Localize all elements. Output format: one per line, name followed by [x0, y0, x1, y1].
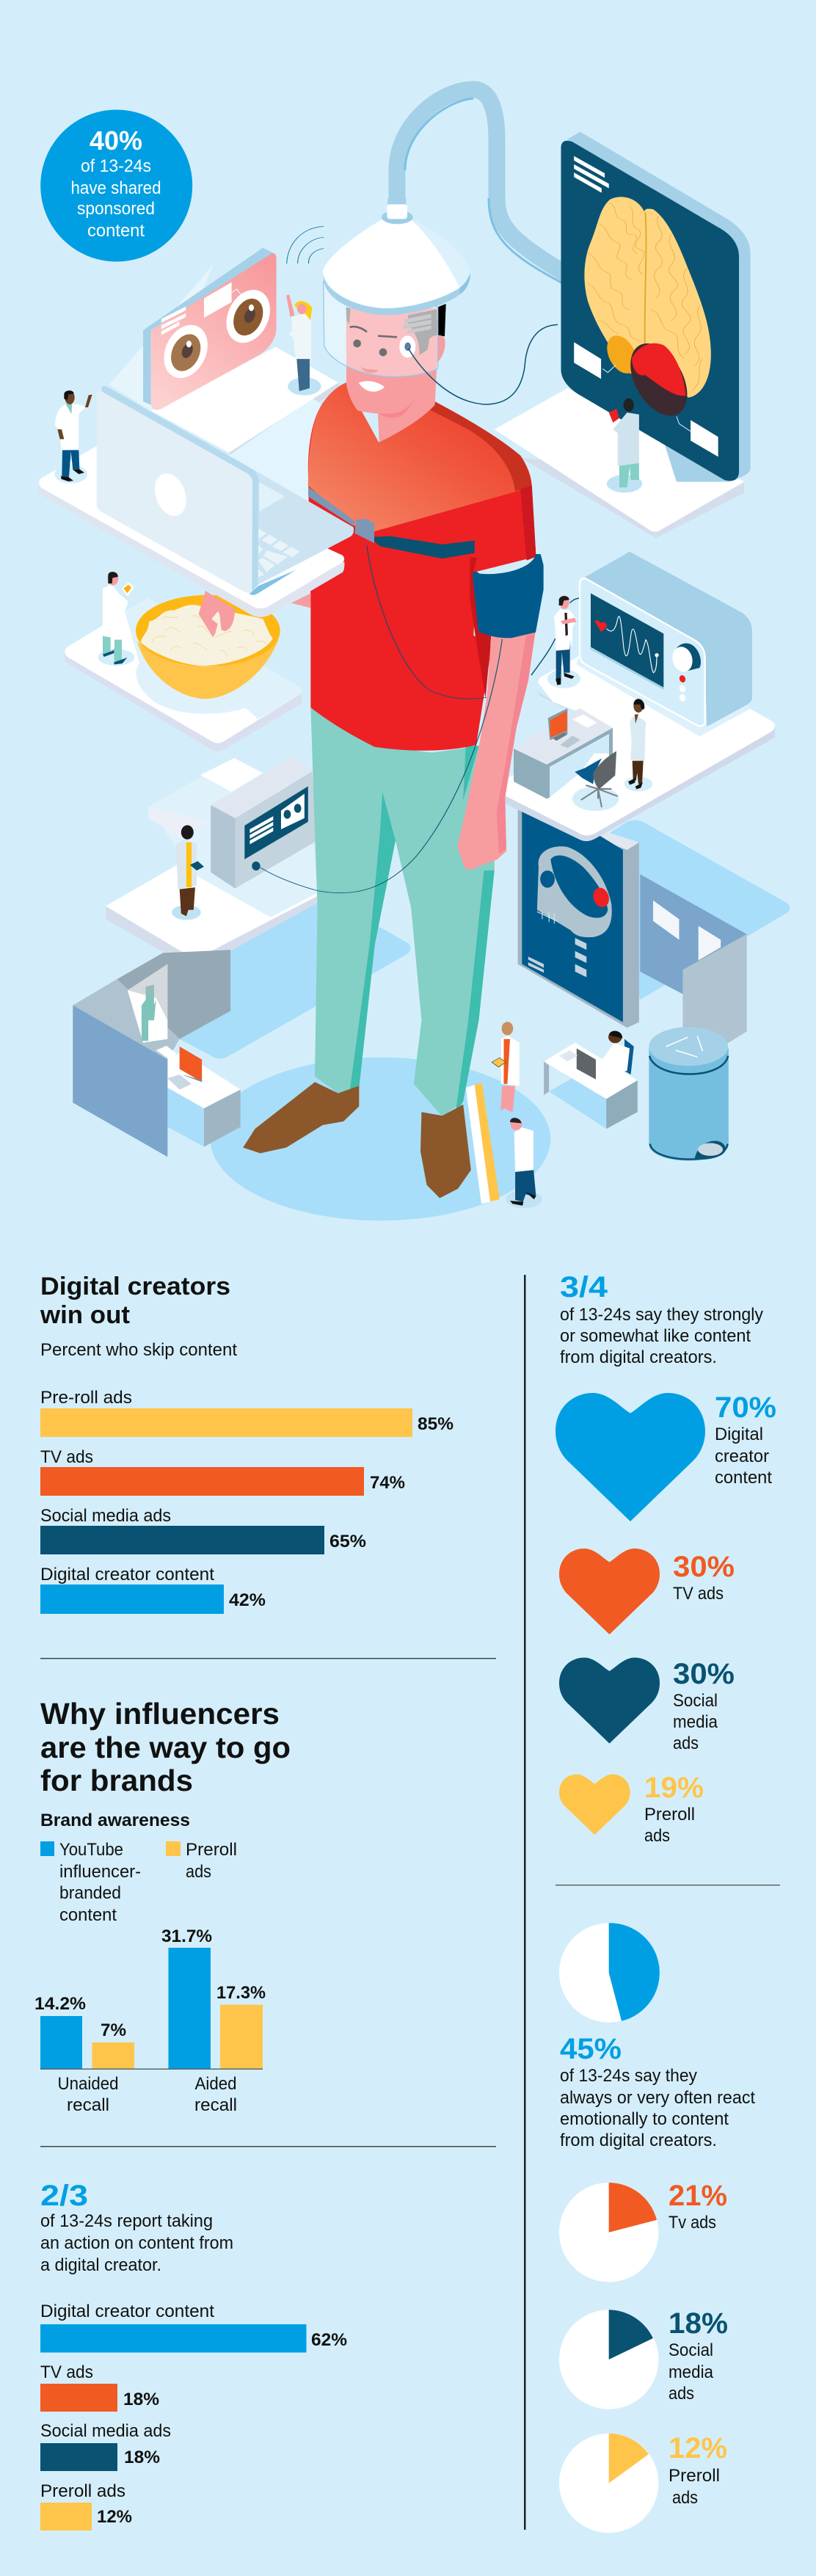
stat text: from digital creators. — [560, 1347, 717, 1367]
pie: 45% — [559, 1923, 660, 2023]
heart: social media ads — [559, 1658, 735, 1753]
bar: tv ads: TV ads — [40, 1447, 93, 1467]
brain — [584, 197, 711, 421]
bowl of popcorn — [136, 595, 280, 699]
callout: 40% circle: of 13-24s — [81, 156, 151, 176]
bar: tv ads — [40, 2362, 159, 2412]
right eye — [220, 287, 277, 346]
panel: emotional reaction pies — [559, 1923, 755, 2533]
legend: branded — [59, 1883, 121, 1903]
legend: content — [59, 1905, 117, 1925]
stat heading: 45% — [560, 2033, 622, 2065]
scientist at far left — [54, 390, 92, 484]
wires — [261, 545, 502, 893]
stat text: or somewhat like content — [560, 1326, 751, 1346]
heading: win out — [40, 1301, 130, 1329]
heart: social media ads: ads — [673, 1733, 699, 1753]
heart: preroll ads — [559, 1772, 704, 1846]
floor shapes — [180, 820, 790, 1220]
pie: social media ads: 18% — [669, 2307, 728, 2340]
bar: pre-roll ads: Pre-roll ads — [40, 1388, 132, 1408]
scientist with tablet, yellow dress — [172, 825, 204, 920]
bar: social media ads: 65% — [329, 1532, 366, 1551]
heading — [40, 1273, 230, 1329]
bar: digital creator content — [40, 1565, 266, 1614]
pie: tv ads: 21% — [669, 2180, 727, 2212]
callout boxes — [574, 342, 718, 456]
subheading: Brand awareness — [40, 1811, 190, 1830]
column chart: brand recall: recall — [194, 2095, 237, 2115]
helmet — [323, 198, 470, 315]
pie: preroll ads: ads — [672, 2488, 698, 2508]
bar: tv ads — [40, 1447, 405, 1496]
callout: 40% circle — [40, 110, 192, 261]
platform: under brain — [495, 388, 744, 538]
laptop connector — [308, 487, 354, 526]
man: sleeve shading — [470, 558, 491, 699]
pie: social media ads — [559, 2307, 728, 2409]
column chart: brand recall: Aided — [195, 2074, 236, 2094]
bar: digital creator content: 62% — [311, 2330, 347, 2350]
heart monitor — [580, 552, 752, 727]
bar: digital creator content: 42% — [229, 1590, 266, 1610]
platform: upper left — [109, 265, 359, 520]
panel: three quarters hearts — [555, 1271, 776, 1846]
laptop — [97, 386, 374, 595]
bar: social media ads — [40, 1506, 366, 1554]
signal arcs — [287, 227, 324, 263]
bar: social media ads: Social media ads — [40, 2421, 171, 2441]
eye panel labels — [161, 283, 232, 335]
bar: digital creator content: Digital creator content — [40, 1565, 214, 1584]
platform: laptop — [39, 444, 344, 617]
stat text: of 13-24s say they — [560, 2066, 697, 2086]
scientist waving by eye panel — [286, 294, 321, 396]
bar: tv ads: TV ads — [40, 2362, 93, 2382]
stat text: a digital creator. — [40, 2255, 161, 2275]
scientist at heart monitor — [531, 595, 580, 688]
heart: preroll ads: ads — [644, 1826, 670, 1846]
legend: ads — [186, 1862, 211, 1882]
heart: digital creator content: Digital — [715, 1425, 763, 1444]
column chart: brand recall: 17.3% — [216, 1983, 266, 2003]
man: trousers — [310, 707, 495, 1116]
eye panel — [143, 248, 277, 410]
bar: preroll ads: 12% — [97, 2507, 132, 2527]
column chart: brand recall: 14.2% — [34, 1994, 86, 2014]
illustration: man wired up in a lab — [39, 90, 790, 1220]
pie: tv ads — [559, 2180, 727, 2282]
man: shirt — [308, 382, 536, 751]
facial features — [353, 340, 361, 347]
stat text: of 13-24s report taking — [40, 2211, 213, 2231]
bar: social media ads: Social media ads — [40, 1506, 171, 1526]
pie: tv ads: Tv ads — [669, 2213, 716, 2233]
platform: bowl — [65, 598, 302, 752]
tube from helmet — [397, 90, 567, 283]
pie: preroll ads: 12% — [669, 2432, 727, 2464]
legend: Preroll — [186, 1840, 237, 1860]
scientist at lower desk — [544, 1031, 638, 1129]
heart: preroll ads: 19% — [644, 1772, 704, 1804]
recycling bin — [649, 1027, 729, 1161]
heart: tv ads: 30% — [673, 1551, 735, 1583]
stat text: always or very often react — [560, 2088, 755, 2108]
legend — [40, 1840, 237, 1925]
bar: tv ads: 18% — [123, 2390, 159, 2409]
scientist with tablet at brain panel — [607, 399, 642, 492]
bar: preroll ads: Preroll ads — [40, 2481, 125, 2501]
heart: tv ads — [559, 1549, 735, 1634]
pie: social media ads: Social — [669, 2340, 713, 2360]
bar: pre-roll ads: 85% — [418, 1414, 453, 1434]
ruler — [466, 1083, 500, 1204]
man: chest strap — [370, 536, 475, 559]
column chart: brand recall: recall — [67, 2095, 109, 2115]
legend: influencer- — [59, 1862, 141, 1882]
panel text lines — [574, 156, 609, 193]
keyboard keys — [258, 528, 299, 577]
scientist woman on right platform — [624, 699, 652, 791]
man: neck and face — [324, 281, 558, 443]
column chart: brand recall: Unaided — [57, 2074, 119, 2094]
bar: digital creator content — [40, 2302, 347, 2353]
stat heading: 2/3 — [40, 2180, 88, 2212]
stat heading: 3/4 — [560, 1271, 608, 1303]
pie: preroll ads: Preroll — [669, 2466, 720, 2486]
platform: mid left with machine — [106, 757, 318, 968]
panel: digital creators win out — [40, 1273, 453, 1614]
heart: digital creator content — [555, 1391, 776, 1521]
pie: preroll ads — [559, 2432, 727, 2533]
hair — [346, 307, 438, 355]
skull panel — [518, 809, 639, 1027]
heart: digital creator content: creator — [715, 1447, 769, 1466]
bar: pre-roll ads — [40, 1388, 453, 1437]
heart: preroll ads: Preroll — [644, 1805, 695, 1824]
scientist woman with yellow tablet — [492, 1022, 520, 1112]
man: shoes — [243, 1082, 471, 1198]
column chart: brand recall: 7% — [101, 2020, 126, 2040]
bar: tv ads: 74% — [370, 1473, 405, 1493]
stat text: from digital creators. — [560, 2131, 717, 2150]
scientist with ruler — [506, 1118, 542, 1208]
monitor machine — [211, 757, 318, 889]
man: forearm — [457, 633, 535, 870]
callout: 40% circle: sponsored — [77, 199, 155, 219]
pie: social media ads: media — [669, 2362, 714, 2382]
heading: for brands — [40, 1764, 193, 1797]
callout: 40% circle: content — [87, 221, 145, 241]
bar: social media ads: 18% — [124, 2448, 160, 2467]
brain panel — [561, 131, 751, 482]
electrode and wire to brain panel — [399, 335, 415, 357]
left eye — [158, 322, 214, 381]
visor — [324, 281, 438, 376]
platform: right with monitor and desk — [495, 655, 775, 841]
stat text — [560, 1305, 763, 1367]
heart: social media ads: media — [673, 1712, 718, 1732]
column chart: brand recall — [34, 1926, 266, 2115]
heading: are the way to go — [40, 1731, 291, 1764]
callout: 40% circle: have shared — [70, 178, 161, 198]
column chart: brand recall: 31.7% — [161, 1926, 212, 1946]
left cabin with desk — [73, 950, 241, 1157]
panel: why influencers — [34, 1697, 291, 2115]
stat text — [560, 2066, 755, 2150]
bar: preroll ads — [40, 2481, 132, 2530]
stat text: an action on content from — [40, 2233, 233, 2253]
subtitle: Percent who skip content — [40, 1340, 237, 1360]
heart: digital creator content: content — [715, 1468, 772, 1488]
bar: social media ads — [40, 2421, 171, 2471]
stat text: of 13-24s say they strongly — [560, 1305, 763, 1325]
man: blood pressure cuff — [473, 554, 544, 638]
heart: tv ads: TV ads — [673, 1584, 724, 1604]
heart: digital creator content: 70% — [715, 1391, 776, 1424]
stat text — [40, 2211, 233, 2275]
heading: Why influencers — [40, 1697, 280, 1731]
panel: two thirds take action — [40, 2180, 347, 2530]
heading — [40, 1697, 291, 1797]
heart: social media ads: Social — [673, 1691, 718, 1711]
heading: Digital creators — [40, 1273, 230, 1300]
pie: social media ads: ads — [669, 2384, 694, 2404]
desk with computer and chair — [514, 708, 619, 811]
stat text: emotionally to content — [560, 2109, 729, 2129]
legend: YouTube — [59, 1840, 123, 1860]
callout: 40% circle: 40% — [90, 125, 142, 156]
heart: social media ads: 30% — [673, 1658, 735, 1690]
bar: digital creator content: Digital creator content — [40, 2302, 214, 2321]
right block with window — [640, 874, 747, 1043]
man: hand in popcorn — [199, 591, 235, 637]
scientist beside bowl — [98, 572, 134, 666]
